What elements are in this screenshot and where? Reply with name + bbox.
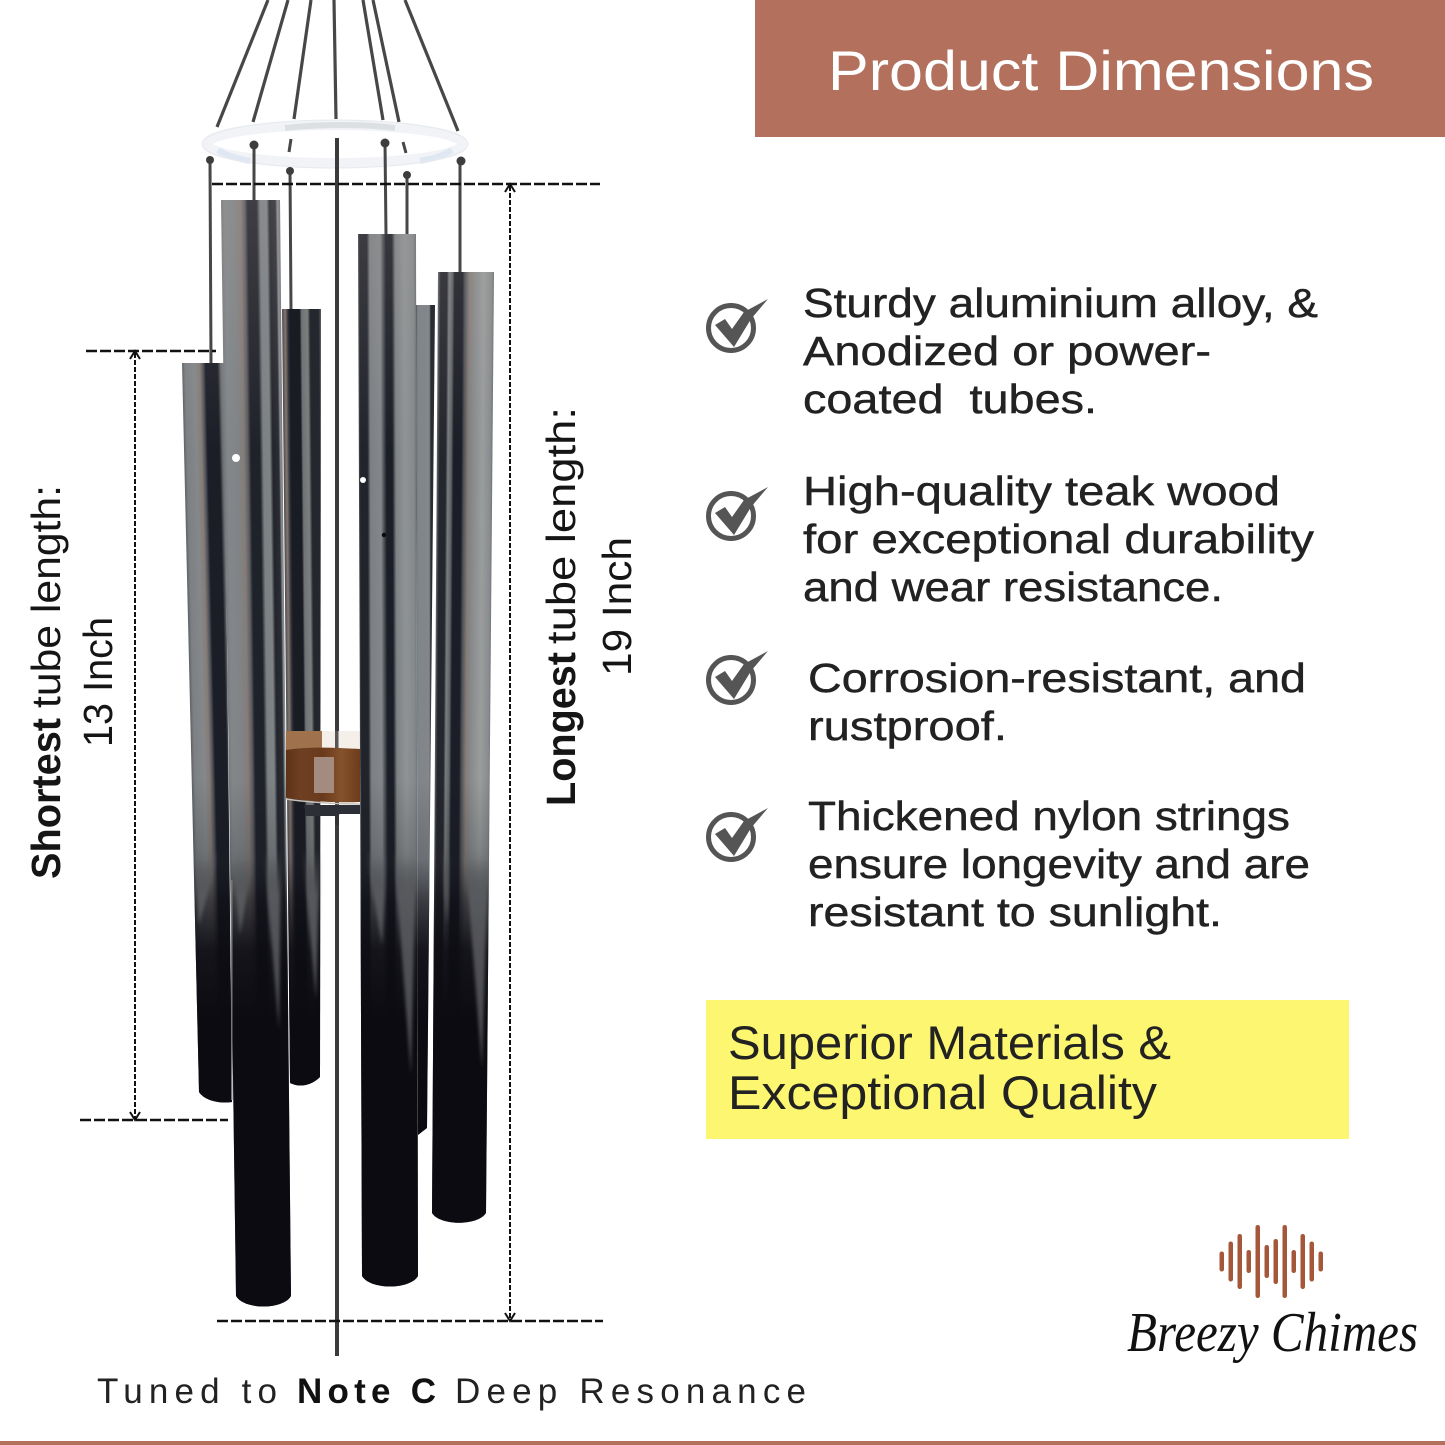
label: longest tube length: Longest <box>538 652 584 806</box>
tube strings and knots <box>210 139 460 364</box>
caption: tuned to note C: Tuned to <box>97 1372 277 1411</box>
tube: third back left <box>282 309 321 1085</box>
icon: sound wave <box>1220 1225 1323 1298</box>
center clapper string <box>335 138 339 1356</box>
heading: Product Dimensions: Product Dimensions <box>828 39 1374 102</box>
wooden center striker <box>286 731 360 825</box>
caption: tuned to note C: Deep Resonance <box>455 1372 806 1411</box>
feature: teak wood <box>708 468 1315 610</box>
label: longest tube length <box>538 407 640 806</box>
feature text <box>803 280 1318 422</box>
feature text: ensure longevity and are <box>808 841 1310 887</box>
header banner <box>755 0 1445 137</box>
feature text: Thickened nylon strings <box>808 793 1290 839</box>
feature text <box>808 793 1310 935</box>
feature: nylon strings <box>708 793 1310 935</box>
label: shortest tube length <box>23 485 121 879</box>
callout: superior materials <box>706 1000 1349 1139</box>
suspension ring <box>202 120 468 168</box>
feature text <box>808 655 1306 749</box>
icon: check mark <box>708 808 768 860</box>
feature text: rustproof. <box>808 703 1007 749</box>
dimension lines: longest tube <box>212 184 603 1321</box>
caption: tuned to note C <box>97 1372 806 1411</box>
label: shortest tube length: tube length: <box>23 485 69 708</box>
feature text: coated tubes. <box>803 376 1097 422</box>
feature text: High-quality teak wood <box>803 468 1280 514</box>
icon: check mark <box>708 651 768 702</box>
tube: front center right <box>358 234 418 1286</box>
feature: corrosion resistant <box>708 651 1306 749</box>
label: longest tube length: tube length: <box>538 407 584 644</box>
feature text: Sturdy aluminium alloy, & <box>803 280 1318 326</box>
caption: tuned to note C: Note C <box>297 1372 436 1411</box>
feature text: and wear resistance. <box>803 564 1223 610</box>
feature text: Anodized or power- <box>803 328 1211 374</box>
feature: sturdy aluminium alloy <box>708 280 1318 422</box>
feature text <box>803 468 1315 610</box>
callout: superior materials: Exceptional Quality <box>728 1066 1158 1119</box>
feature text: resistant to sunlight. <box>808 889 1222 935</box>
dimension lines: shortest tube <box>80 351 228 1120</box>
label: shortest tube length: Shortest <box>23 718 69 879</box>
tube: longest front left <box>221 200 291 1306</box>
suspension strings <box>217 0 458 131</box>
label: longest tube length: 19 Inch <box>594 537 640 676</box>
tube: shortest <box>182 363 232 1103</box>
footer bar <box>0 1441 1445 1445</box>
logo: Breezy Chimes <box>1127 1225 1418 1364</box>
icon: check mark <box>708 299 768 350</box>
wind chime product illustration <box>182 0 494 1356</box>
feature text: Corrosion-resistant, and <box>808 655 1306 701</box>
tube: right <box>432 272 494 1223</box>
tube: back right short <box>416 305 435 1135</box>
feature text: for exceptional durability <box>803 516 1315 562</box>
callout: superior materials: Superior Materials & <box>728 1016 1171 1069</box>
icon: check mark <box>708 487 768 538</box>
tube holes <box>232 454 386 537</box>
label: shortest tube length: 13 Inch <box>75 617 121 747</box>
